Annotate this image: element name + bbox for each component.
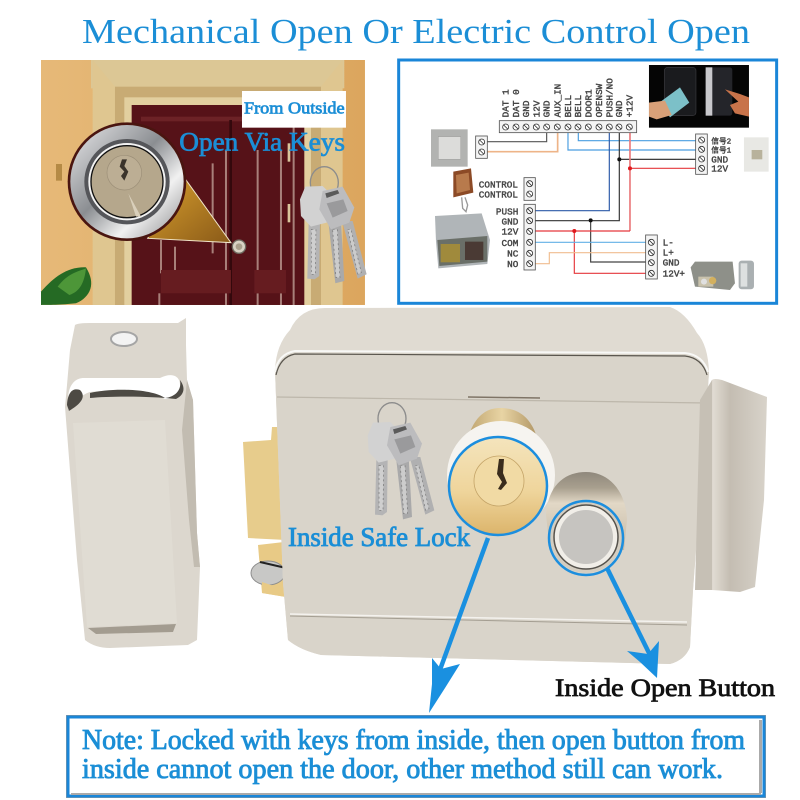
icon: bell (744, 137, 769, 172)
terminal strip: AUX_IN (552, 84, 563, 117)
icon: small lock (691, 261, 754, 290)
door panels (159, 127, 294, 305)
magnifier pointer (148, 177, 231, 243)
terminal strip: BELL (573, 95, 584, 117)
title: Mechanical Open Or Electric Control Open (82, 12, 750, 51)
icon: remote control (453, 168, 473, 212)
bell terminal (696, 134, 732, 175)
lock terminal: 12V+ (663, 268, 685, 279)
hinge plate (56, 164, 62, 181)
terminal strip: DAT 1 (501, 89, 512, 117)
power supply terminal (496, 204, 535, 270)
control terminal (479, 178, 535, 200)
panel: door photo from outside (41, 60, 367, 305)
plant (41, 267, 91, 305)
label: inside open button: Inside Open Button (555, 675, 776, 702)
bell terminal: 12V (711, 164, 728, 175)
power supply terminal: PUSH (496, 206, 518, 217)
icon: exit switch (431, 129, 468, 167)
door frame (93, 60, 343, 305)
icon: keys on lock (368, 403, 434, 519)
power supply terminal: NC (507, 249, 519, 260)
lock terminal (646, 235, 685, 279)
label: from outside (242, 91, 346, 128)
terminal strip: DOOR1 (583, 89, 594, 117)
magnified cylinder (68, 122, 186, 241)
callout: note: Note: Locked with keys from inside, then open button from (82, 725, 745, 756)
brass bolt (243, 427, 286, 597)
terminal strip: +12V (624, 95, 635, 117)
terminal strip: GND (614, 100, 625, 117)
label: open via keys: Open Via Keys (179, 126, 345, 156)
highlight circle: button (549, 501, 623, 575)
power supply terminal: COM (502, 238, 518, 249)
callout: note: inside cannot open the door, other method still can work. (82, 754, 723, 785)
lock terminal: L+ (663, 248, 674, 259)
terminal strip: GND (521, 100, 532, 117)
door knob (232, 240, 246, 253)
key cylinder (447, 408, 555, 535)
lock terminal: GND (663, 258, 680, 269)
control terminal: CONTROL (479, 189, 518, 200)
label: from outside: From Outside (244, 99, 345, 118)
terminal strip (499, 78, 637, 133)
terminal strip: 12V (531, 100, 542, 117)
arrow: button to label (607, 568, 659, 678)
terminal strip: GND (542, 100, 553, 117)
wires (487, 132, 696, 273)
power supply terminal: GND (502, 216, 519, 227)
highlight circle: safe lock (449, 437, 547, 535)
inside open button (546, 472, 627, 575)
icon: keys (300, 167, 367, 283)
exit switch terminal (476, 136, 487, 158)
bell terminal: 信号2 (711, 135, 732, 146)
power supply terminal: NO (507, 259, 519, 270)
ceiling band (91, 60, 344, 88)
control terminal: CONTROL (479, 180, 518, 191)
callout: note (66, 715, 766, 798)
terminal strip: PUSH/NO (604, 78, 615, 117)
bell terminal: GND (711, 154, 728, 165)
right strike plate (700, 379, 767, 592)
terminal strip: DAT 0 (511, 89, 522, 117)
panel: wiring diagram (399, 60, 777, 303)
terminal strip: BELL (563, 95, 574, 117)
photo: access keypads (649, 65, 749, 128)
main lock body (275, 307, 712, 664)
side view of lock (65, 318, 200, 648)
door leaf (132, 105, 304, 305)
icon: power supply (435, 213, 490, 268)
lock terminal: L- (663, 238, 674, 249)
label: inside safe lock: Inside Safe Lock (288, 522, 470, 552)
arrow: lock to note (429, 538, 488, 713)
terminal strip: OPENSW (594, 83, 605, 117)
bell terminal: 信号1 (711, 145, 732, 156)
power supply terminal: 12V (502, 227, 519, 238)
